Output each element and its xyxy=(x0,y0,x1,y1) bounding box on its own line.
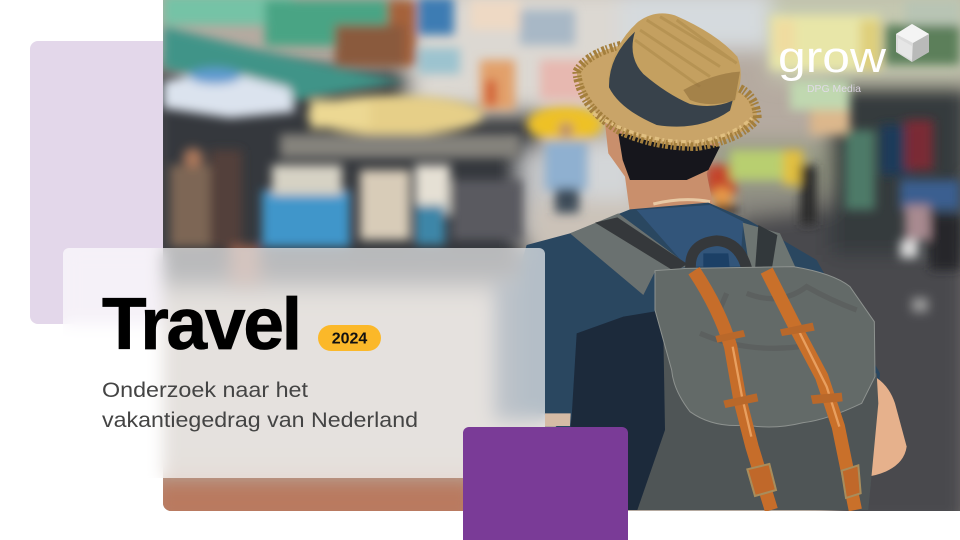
straw hat xyxy=(577,13,757,147)
shoulder straps xyxy=(570,213,690,295)
logo: grow DPG Media: grow xyxy=(778,33,886,82)
logo: grow DPG Media xyxy=(778,24,929,95)
title: Travel xyxy=(102,284,302,365)
subtitle: vakantiegedrag van Nederland xyxy=(102,408,418,432)
phone and handle xyxy=(703,253,730,272)
leather straps xyxy=(694,271,855,510)
hair xyxy=(618,133,720,180)
panel: lavender accent block xyxy=(30,41,180,324)
t-shirt xyxy=(520,203,880,510)
panel: translucent title card xyxy=(63,248,545,478)
year badge: 2024 xyxy=(332,330,367,348)
subtitle xyxy=(102,378,418,432)
icon: cube xyxy=(896,24,929,62)
strap loops and buckles xyxy=(715,330,745,343)
arm xyxy=(868,375,907,477)
subtitle: Onderzoek naar het xyxy=(102,378,308,402)
backpack flap xyxy=(655,267,875,427)
photo: traveller with hat and backpack on a market street xyxy=(163,0,960,511)
neck and ear xyxy=(605,123,720,213)
panel: purple accent block xyxy=(463,427,628,540)
necklace xyxy=(653,200,710,204)
logo: grow DPG Media: DPG Media xyxy=(807,83,861,95)
backpack body xyxy=(637,333,878,510)
year badge xyxy=(318,325,381,351)
traveller figure xyxy=(520,13,907,510)
